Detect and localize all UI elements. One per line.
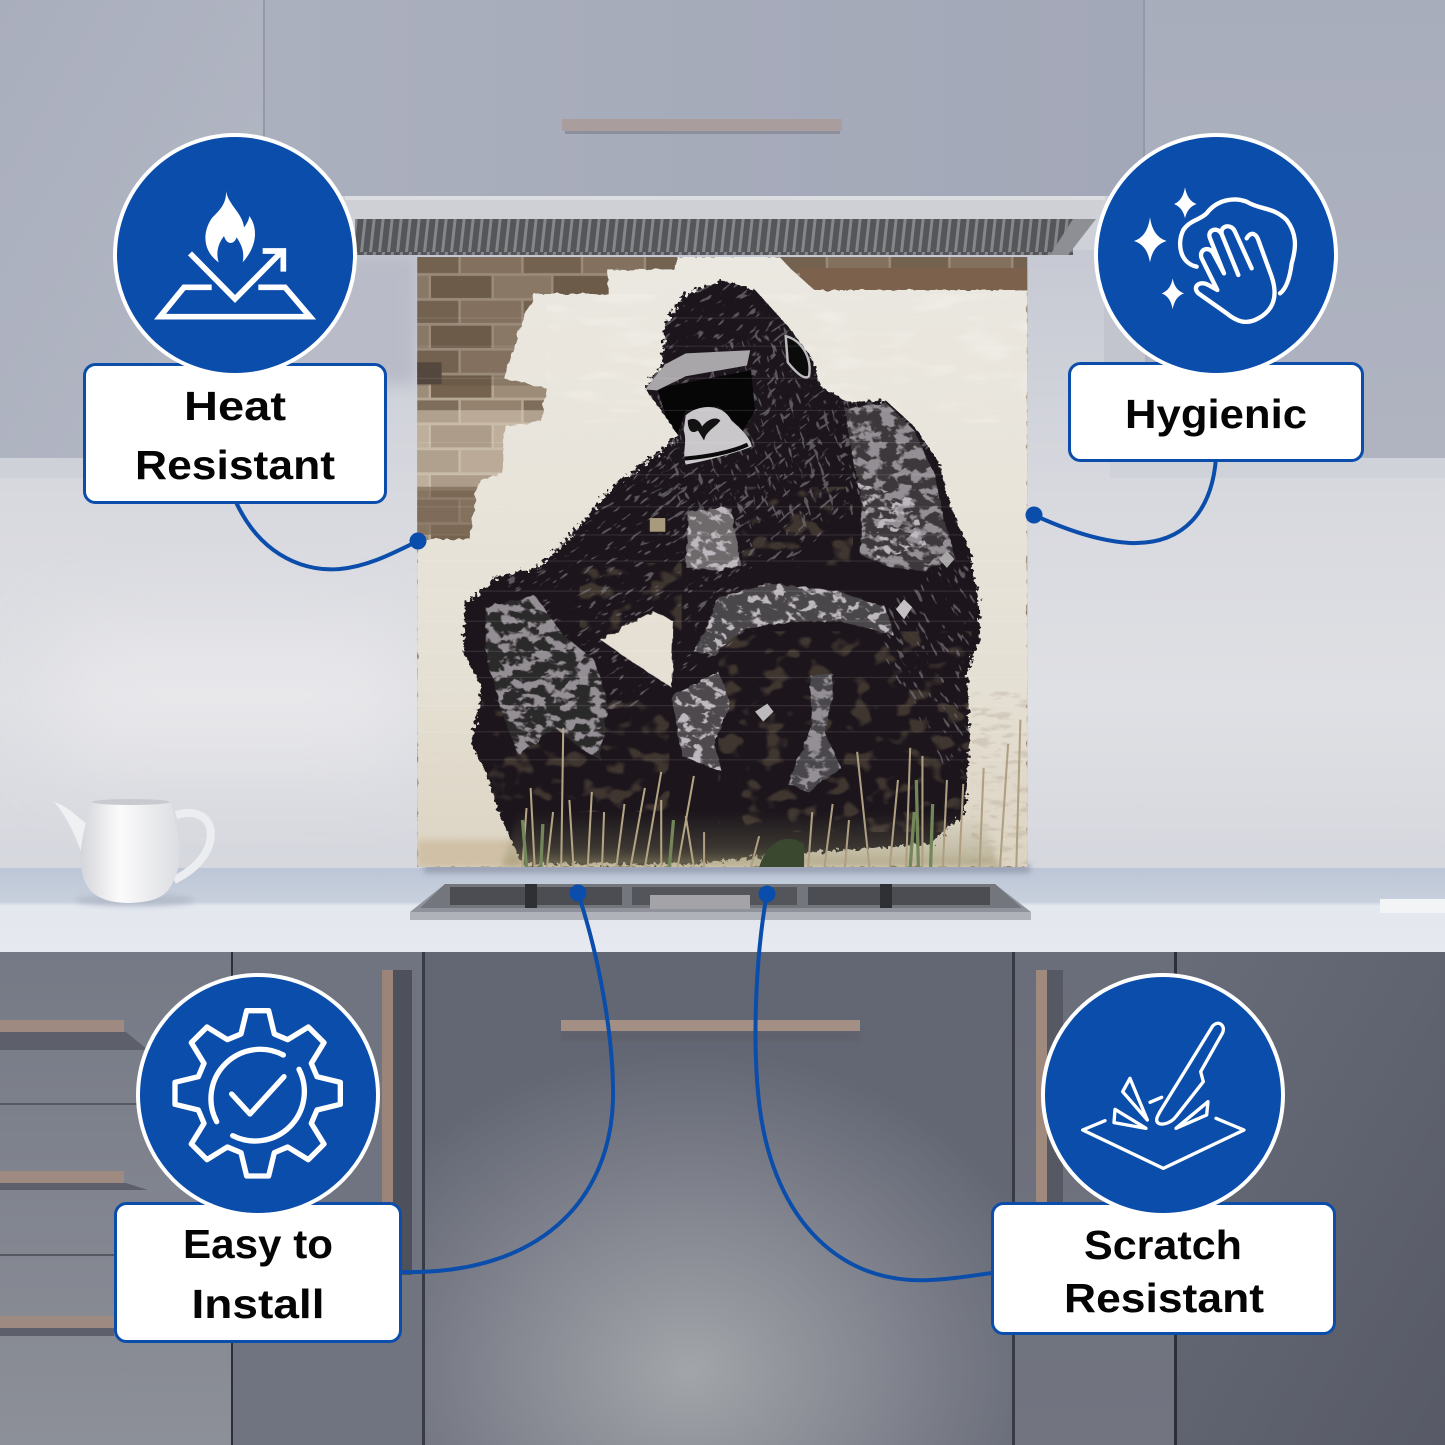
- upper cabinet centre: [265, 0, 1143, 196]
- muzzle: [684, 407, 752, 465]
- brick wall: [417, 257, 1027, 867]
- heading: Easy to: [183, 1221, 333, 1267]
- mortar courses: [417, 318, 1027, 760]
- grass haze: [502, 821, 1000, 867]
- connector: hygienic: [1026, 458, 1216, 543]
- upper cabinet right: [1145, 0, 1445, 458]
- connector: easy to install: [402, 884, 613, 1272]
- icon badge: [138, 975, 378, 1215]
- callout: heat resistant: [84, 135, 386, 502]
- heading line 2: Resistant: [1064, 1275, 1264, 1321]
- speck: [650, 518, 665, 532]
- grey forearm patches: [694, 583, 894, 655]
- panel shadow: [424, 864, 1030, 873]
- grey left fist: [486, 595, 608, 760]
- whitewash: [417, 257, 1027, 867]
- label box: [992, 1204, 1334, 1334]
- door handles: [382, 970, 1063, 1275]
- callout: scratch resistant: [992, 975, 1334, 1334]
- callout: easy to install: [116, 975, 400, 1342]
- icon: flame and reflected heat arrow: [160, 191, 310, 317]
- label box: [1070, 364, 1362, 460]
- hair streaks: [506, 282, 978, 776]
- heading line 2: Install: [192, 1281, 324, 1327]
- wall: [0, 250, 1445, 875]
- hand patch: [671, 671, 731, 772]
- grey chest tag: [686, 507, 741, 571]
- connector: heat resistant: [235, 500, 426, 569]
- countertop: [0, 868, 1445, 952]
- ear: [786, 336, 810, 377]
- arm gap: [600, 611, 673, 688]
- fingers patch: [788, 673, 841, 792]
- brown mottled body: [482, 282, 978, 832]
- tag specks: [896, 599, 912, 619]
- grass: [522, 720, 1020, 867]
- lower cabinets: [0, 952, 232, 1445]
- heading: Hygienic: [1125, 391, 1307, 437]
- blackened eye area: [657, 370, 755, 435]
- callout: hygienic: [1070, 135, 1362, 460]
- upper cabinet left: [0, 0, 263, 458]
- teapot: [54, 799, 211, 906]
- upper handle: [562, 119, 842, 134]
- gorilla: [460, 279, 982, 867]
- heading line 2: Resistant: [135, 442, 335, 488]
- icon: knife scratching a surface: [1083, 1023, 1244, 1168]
- grey shoulder patch: [845, 402, 955, 571]
- icon: wiping hand with sparkles: [1134, 187, 1295, 322]
- connector: scratch resistant: [756, 886, 992, 1280]
- icon: gear with check mark: [175, 1011, 340, 1176]
- icon badge: [1043, 975, 1283, 1215]
- label box: [84, 364, 386, 502]
- icon badge: [1096, 135, 1336, 375]
- extractor hood: [345, 196, 1105, 255]
- heading: Scratch: [1084, 1222, 1242, 1268]
- heading: Heat: [184, 383, 286, 429]
- whitewash staining: [594, 294, 1028, 399]
- ground wear: [417, 840, 519, 867]
- body silhouette: [463, 280, 980, 864]
- label box: [116, 1204, 400, 1342]
- cap visor: [645, 350, 750, 390]
- icon badge: [115, 135, 355, 375]
- panel: gorilla glass splashback: [417, 257, 1028, 867]
- drawer handles: [0, 1020, 148, 1336]
- cooktop: [410, 884, 1031, 920]
